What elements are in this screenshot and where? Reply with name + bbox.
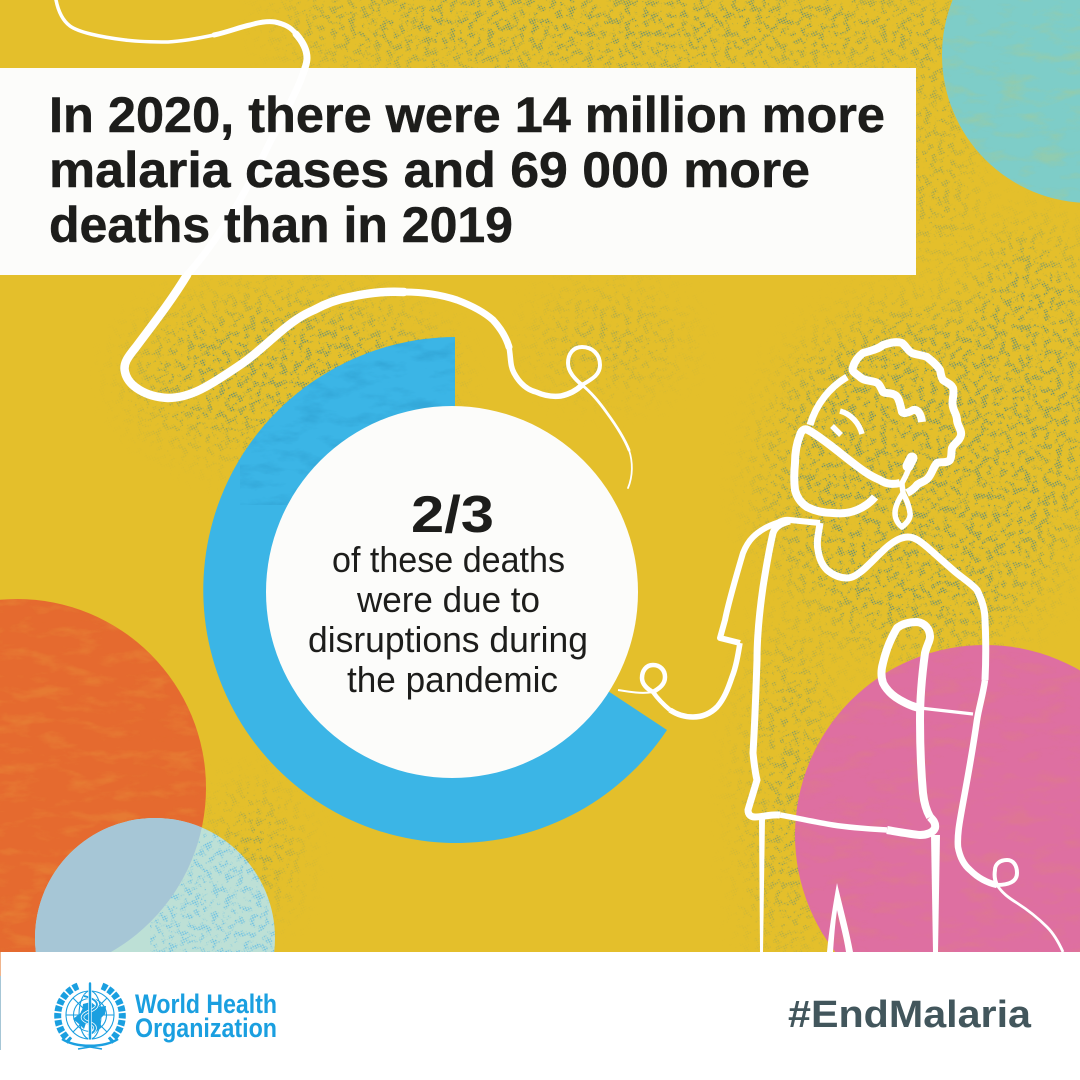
donut statistic text: 2/3 [411, 486, 494, 544]
donut centre circle [266, 406, 638, 778]
World Health Organization wordmark: World Health [135, 989, 277, 1019]
headline: deaths than in 2019 [49, 197, 513, 253]
continents [73, 1002, 106, 1034]
inner torso line and hem [748, 521, 790, 817]
shoulder and sleeve [720, 520, 820, 643]
raised arm loop [882, 622, 930, 817]
donut statistic text: of these deaths [332, 539, 565, 580]
headline: In 2020, there were 14 million more [49, 87, 885, 143]
arm reaching to the donut [670, 643, 740, 717]
white thread line at top crossing the panel [56, 0, 307, 275]
World Health Organization wordmark [135, 989, 277, 1043]
headline panel [0, 68, 916, 275]
white thread line above the donut with loop [124, 275, 632, 488]
headline: malaria cases and 69 000 more [49, 142, 810, 198]
headline [49, 87, 885, 253]
decorative teal circle, top right [940, 0, 1080, 205]
globe grid [66, 991, 114, 1039]
icon: World Health Organization emblem [58, 982, 122, 1049]
hashtag: #EndMalaria [788, 994, 1032, 1036]
hair [852, 342, 961, 493]
laurel wreath [58, 986, 122, 1041]
donut statistic text: were due to [356, 579, 540, 620]
neck and collar with right body side [817, 523, 986, 680]
decorative orange circle, bottom left [0, 595, 210, 977]
footer band [0, 952, 1080, 1080]
earring [895, 458, 912, 527]
decorative pink circle, bottom right [795, 645, 1080, 952]
staff and serpent [82, 996, 97, 1035]
face mask [794, 429, 900, 513]
World Health Organization wordmark: Organization [135, 1013, 277, 1043]
closed eye [832, 411, 862, 435]
donut statistic text: disruptions during [308, 619, 588, 660]
forehead [810, 377, 847, 425]
decorative pale green circle overlapping orange [35, 818, 275, 952]
legs [759, 818, 765, 952]
figure of a masked woman drawn in white line [618, 342, 1063, 952]
donut statistic text [308, 486, 588, 700]
donut statistic text: the pandemic [347, 659, 558, 700]
donut chart: two-thirds ring [203, 335, 667, 843]
